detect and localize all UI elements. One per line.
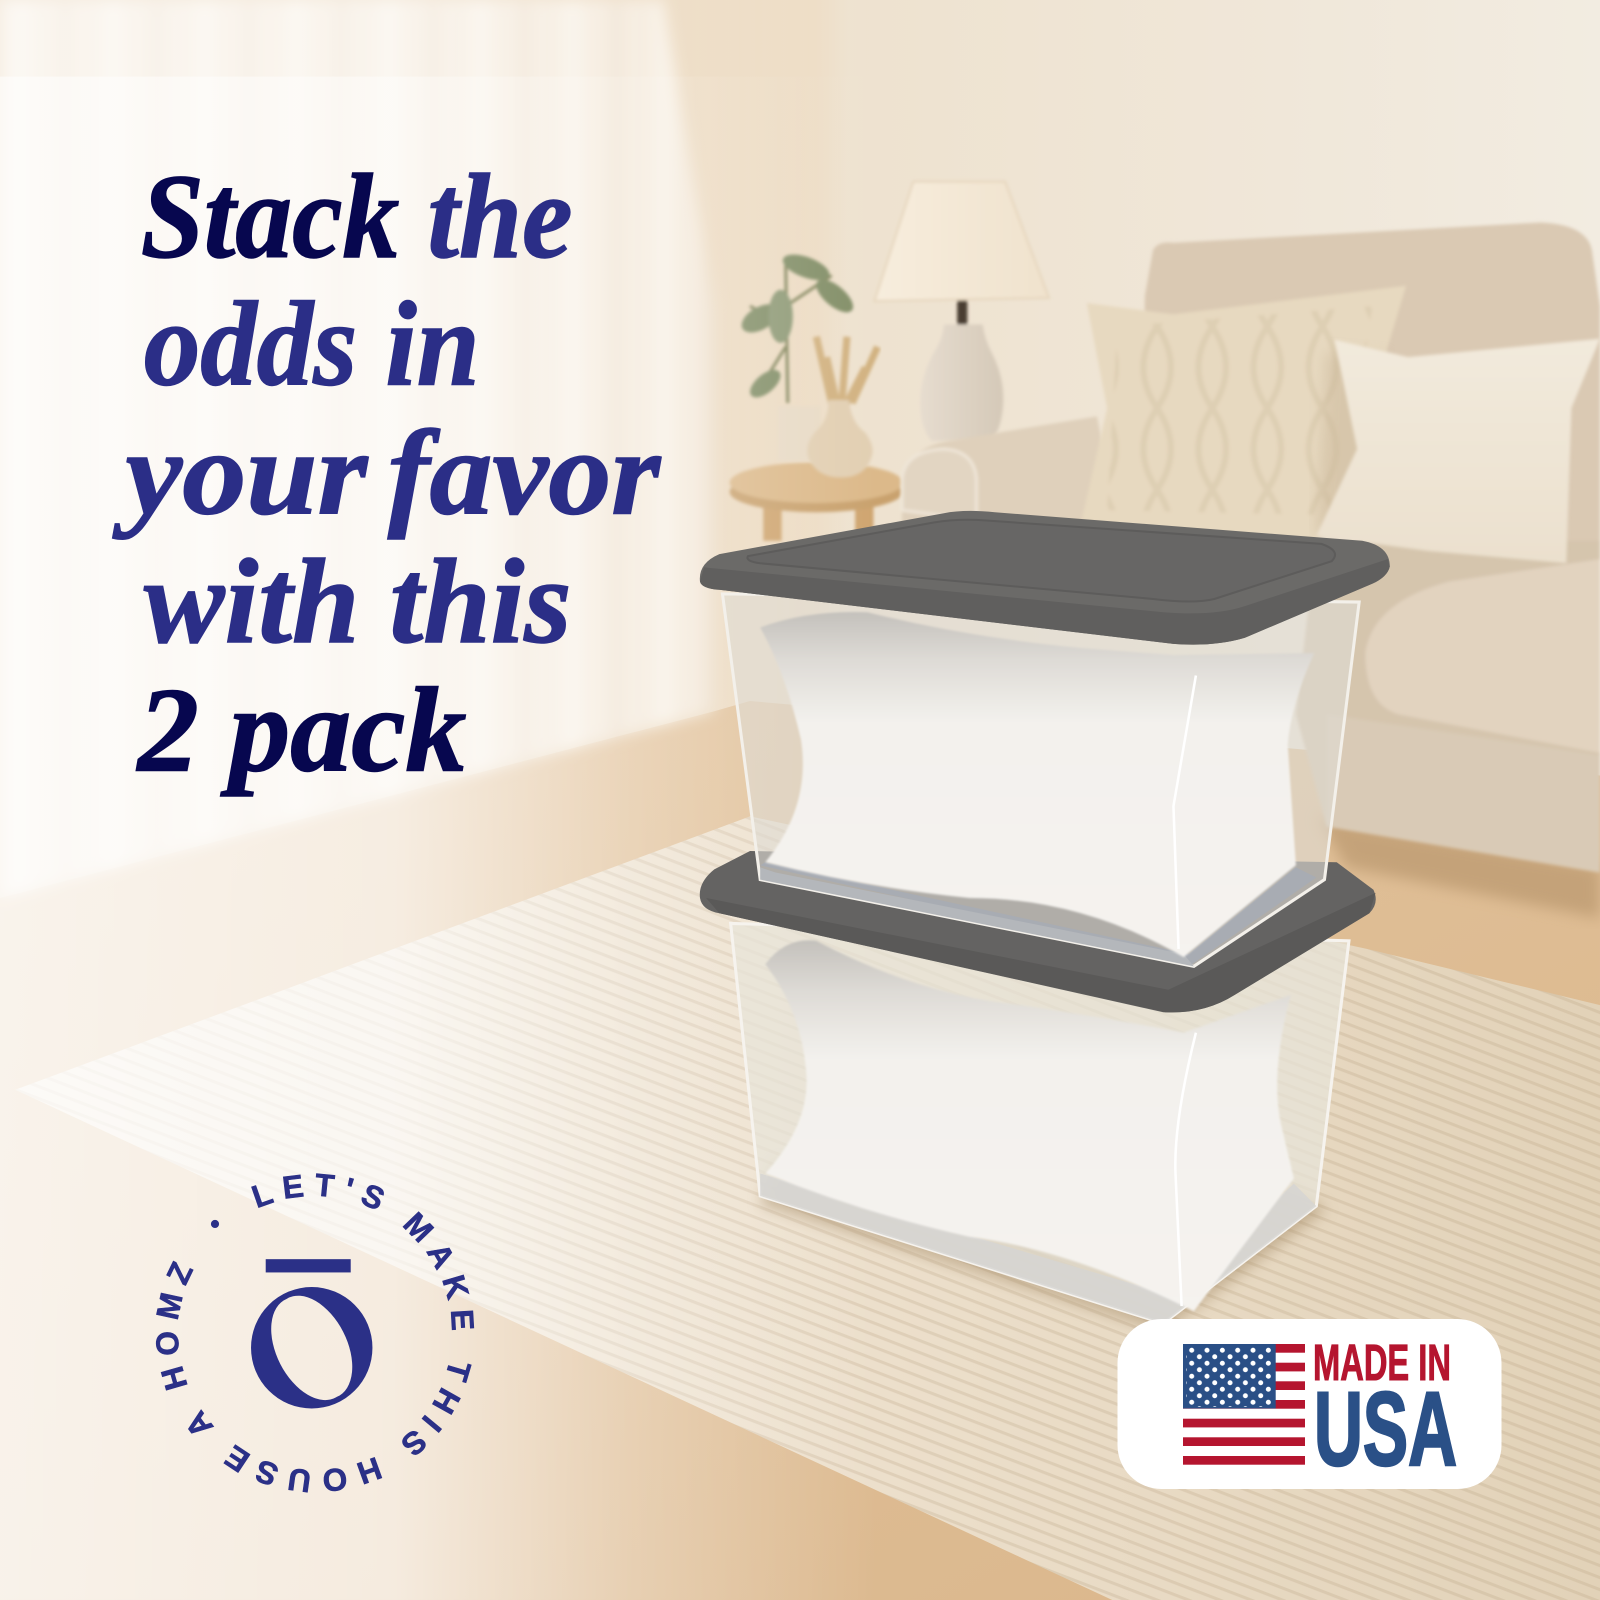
circular slogan: LET'S MAKE THIS HOUSE A HOMZ bbox=[156, 1173, 474, 1493]
top band fade bbox=[0, 0, 878, 77]
logo bar bbox=[266, 1259, 351, 1272]
cream pillow bbox=[1316, 339, 1600, 563]
made in text: MADE IN bbox=[1313, 1334, 1451, 1391]
headline line 1: Stack the bbox=[141, 151, 572, 284]
headline line 3: your bbox=[112, 407, 369, 540]
curtain bbox=[0, 0, 714, 898]
top lid front band bbox=[700, 559, 1390, 645]
wall bbox=[0, 0, 1600, 918]
top box bottom strip bbox=[760, 867, 1194, 966]
top lid recess bbox=[747, 520, 1335, 602]
top pillow seam bbox=[1173, 676, 1196, 949]
plant bbox=[737, 249, 858, 461]
wood floor bbox=[0, 701, 1600, 1600]
cable knit pillow bbox=[1082, 286, 1406, 541]
american flag bbox=[1183, 1344, 1305, 1465]
headline line 5: 2 pack bbox=[136, 664, 466, 797]
sofa seat base bbox=[1296, 541, 1600, 872]
headline line 3 bbox=[112, 407, 661, 540]
bottom pillow bbox=[765, 940, 1294, 1311]
headline line 4: with this bbox=[144, 536, 571, 669]
sofa floor shadow bbox=[1316, 816, 1600, 918]
headline bbox=[112, 151, 661, 797]
seal arc path bbox=[178, 1196, 452, 1470]
bottom box body bbox=[731, 923, 1349, 1323]
top box floor panel bbox=[760, 862, 1316, 964]
sofa seat cushion bbox=[1365, 559, 1600, 753]
lamp bbox=[874, 182, 1049, 441]
sofa arm front bbox=[902, 449, 977, 520]
sofa bbox=[902, 222, 1600, 872]
sofa back cushion bbox=[1143, 222, 1600, 571]
bottom lid bbox=[700, 851, 1376, 1012]
top box body bbox=[722, 594, 1359, 966]
stacked storage boxes bbox=[700, 511, 1390, 1332]
side table bbox=[730, 462, 903, 541]
sofa front bbox=[1327, 714, 1600, 872]
bottom box floor panel bbox=[760, 1173, 1316, 1323]
headline line 2: odds in bbox=[144, 279, 480, 412]
logo letter o bbox=[251, 1287, 372, 1408]
bottom box shadow bbox=[760, 1163, 1327, 1332]
white fade overlay bbox=[0, 77, 878, 1600]
made in USA badge bbox=[1118, 1319, 1502, 1489]
badge background bbox=[1118, 1319, 1502, 1489]
top lid bbox=[700, 511, 1390, 645]
cream pillow shadow bbox=[1316, 352, 1388, 536]
brand seal bbox=[156, 1173, 474, 1493]
rug bbox=[15, 816, 1600, 1600]
top pillow bbox=[760, 612, 1314, 957]
seal dot bbox=[211, 1220, 219, 1228]
USA text: USA bbox=[1314, 1371, 1457, 1488]
headline line 3: favor bbox=[388, 407, 661, 540]
bottom pillow seam bbox=[1175, 1033, 1196, 1306]
sofa arm bbox=[902, 416, 1122, 541]
vase with dried flowers bbox=[807, 337, 878, 478]
